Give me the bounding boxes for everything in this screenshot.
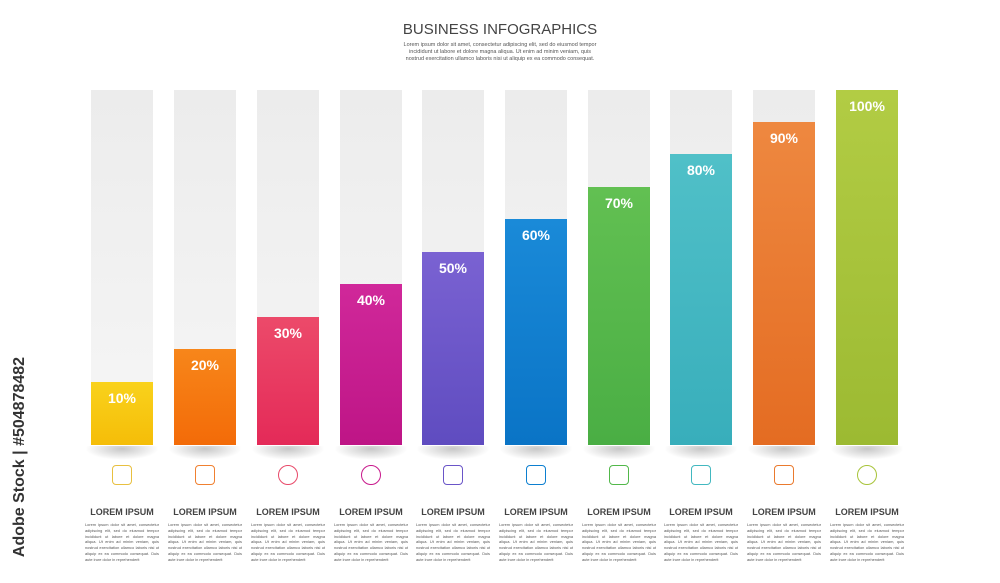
subtitle text: Lorem ipsum dolor sit amet, consectetur adipiscing elit, sed do eiusmod tempor incididunt ut labore et dolore magna aliqua. Ut enim ad minim veniam, quis nostrud exercitation ullamco laboris nisi ut aliquip ex ea commodo consequat.	[404, 42, 596, 62]
column 4: Lorem ipsum dolor sit amet, consectetur adipiscing elit, sed do eiusmod tempor incididunt ut labore et dolore magna aliqua. Ut enim ad minim veniam, quis nostrud exercitation ullamco laboris nisi ut aliquip ex ea commodo consequat. Duis aute irure dolor in reprehenderit	[334, 522, 408, 562]
bar 30%	[257, 90, 319, 445]
column 7: LOREM IPSUM	[587, 507, 651, 517]
bar 20%	[174, 90, 236, 445]
bar 70%: 70%	[605, 195, 633, 211]
bar 40%: 40%	[357, 292, 385, 308]
column 7	[582, 465, 656, 562]
bar 10%	[91, 90, 153, 445]
column 9: LOREM IPSUM	[752, 507, 816, 517]
bar 90%	[753, 90, 815, 445]
column 9: Lorem ipsum dolor sit amet, consectetur adipiscing elit, sed do eiusmod tempor incididunt ut labore et dolore magna aliqua. Ut enim ad minim veniam, quis nostrud exercitation ullamco laboris nisi ut aliquip ex ea commodo consequat. Duis aute irure dolor in reprehenderit	[747, 522, 821, 562]
bar 80%	[670, 90, 732, 445]
column 5	[416, 465, 490, 562]
column 6: Lorem ipsum dolor sit amet, consectetur adipiscing elit, sed do eiusmod tempor incididunt ut labore et dolore magna aliqua. Ut enim ad minim veniam, quis nostrud exercitation ullamco laboris nisi ut aliquip ex ea commodo consequat. Duis aute irure dolor in reprehenderit	[499, 522, 573, 562]
bar 30%: 30%	[274, 325, 302, 341]
column 7: Lorem ipsum dolor sit amet, consectetur adipiscing elit, sed do eiusmod tempor incididunt ut labore et dolore magna aliqua. Ut enim ad minim veniam, quis nostrud exercitation ullamco laboris nisi ut aliquip ex ea commodo consequat. Duis aute irure dolor in reprehenderit	[582, 522, 656, 562]
column 3: LOREM IPSUM	[256, 507, 320, 517]
bar 60%: 60%	[522, 227, 550, 243]
column 3	[251, 465, 326, 562]
bar 10%: 10%	[108, 390, 136, 406]
column 9	[747, 465, 822, 562]
bar 90%: 90%	[770, 130, 798, 146]
column 1: Lorem ipsum dolor sit amet, consectetur adipiscing elit, sed do eiusmod tempor incididunt ut labore et dolore magna aliqua. Ut enim ad minim veniam, quis nostrud exercitation ullamco laboris nisi ut aliquip ex ea commodo consequat. Duis aute irure dolor in reprehenderit	[85, 522, 159, 562]
column 8: LOREM IPSUM	[669, 507, 733, 517]
bar 40%	[340, 90, 402, 445]
column 3: Lorem ipsum dolor sit amet, consectetur adipiscing elit, sed do eiusmod tempor incididunt ut labore et dolore magna aliqua. Ut enim ad minim veniam, quis nostrud exercitation ullamco laboris nisi ut aliquip ex ea commodo consequat. Duis aute irure dolor in reprehenderit	[251, 522, 325, 562]
column 2	[168, 465, 242, 562]
bar 20%: 20%	[191, 357, 219, 373]
bar 50%: 50%	[439, 260, 467, 276]
column 5: LOREM IPSUM	[421, 507, 485, 517]
title: BUSINESS INFOGRAPHICS	[403, 21, 597, 38]
column 8	[664, 465, 738, 562]
column 1	[85, 465, 160, 562]
column 6: LOREM IPSUM	[504, 507, 568, 517]
column 1: LOREM IPSUM	[90, 507, 154, 517]
column 6	[499, 465, 574, 562]
column 8: Lorem ipsum dolor sit amet, consectetur adipiscing elit, sed do eiusmod tempor incididunt ut labore et dolore magna aliqua. Ut enim ad minim veniam, quis nostrud exercitation ullamco laboris nisi ut aliquip ex ea commodo consequat. Duis aute irure dolor in reprehenderit	[664, 522, 738, 562]
column 2: LOREM IPSUM	[173, 507, 237, 517]
column 4	[334, 465, 408, 562]
column 4: LOREM IPSUM	[339, 507, 403, 517]
column 10	[830, 465, 904, 562]
bar 100%	[836, 90, 898, 445]
bar 60%	[505, 90, 567, 445]
column 10: Lorem ipsum dolor sit amet, consectetur adipiscing elit, sed do eiusmod tempor incididunt ut labore et dolore magna aliqua. Ut enim ad minim veniam, quis nostrud exercitation ullamco laboris nisi ut aliquip ex ea commodo consequat. Duis aute irure dolor in reprehenderit	[830, 522, 904, 562]
column 2: Lorem ipsum dolor sit amet, consectetur adipiscing elit, sed do eiusmod tempor incididunt ut labore et dolore magna aliqua. Ut enim ad minim veniam, quis nostrud exercitation ullamco laboris nisi ut aliquip ex ea commodo consequat. Duis aute irure dolor in reprehenderit	[168, 522, 242, 562]
bar 80%: 80%	[687, 162, 715, 178]
bar 70%	[588, 90, 650, 445]
watermark: Adobe Stock | #504878482	[11, 357, 28, 557]
bar 100%: 100%	[849, 98, 885, 114]
column 10: LOREM IPSUM	[835, 507, 899, 517]
bar 50%	[422, 90, 484, 445]
column 5: Lorem ipsum dolor sit amet, consectetur adipiscing elit, sed do eiusmod tempor incididunt ut labore et dolore magna aliqua. Ut enim ad minim veniam, quis nostrud exercitation ullamco laboris nisi ut aliquip ex ea commodo consequat. Duis aute irure dolor in reprehenderit	[416, 522, 490, 562]
